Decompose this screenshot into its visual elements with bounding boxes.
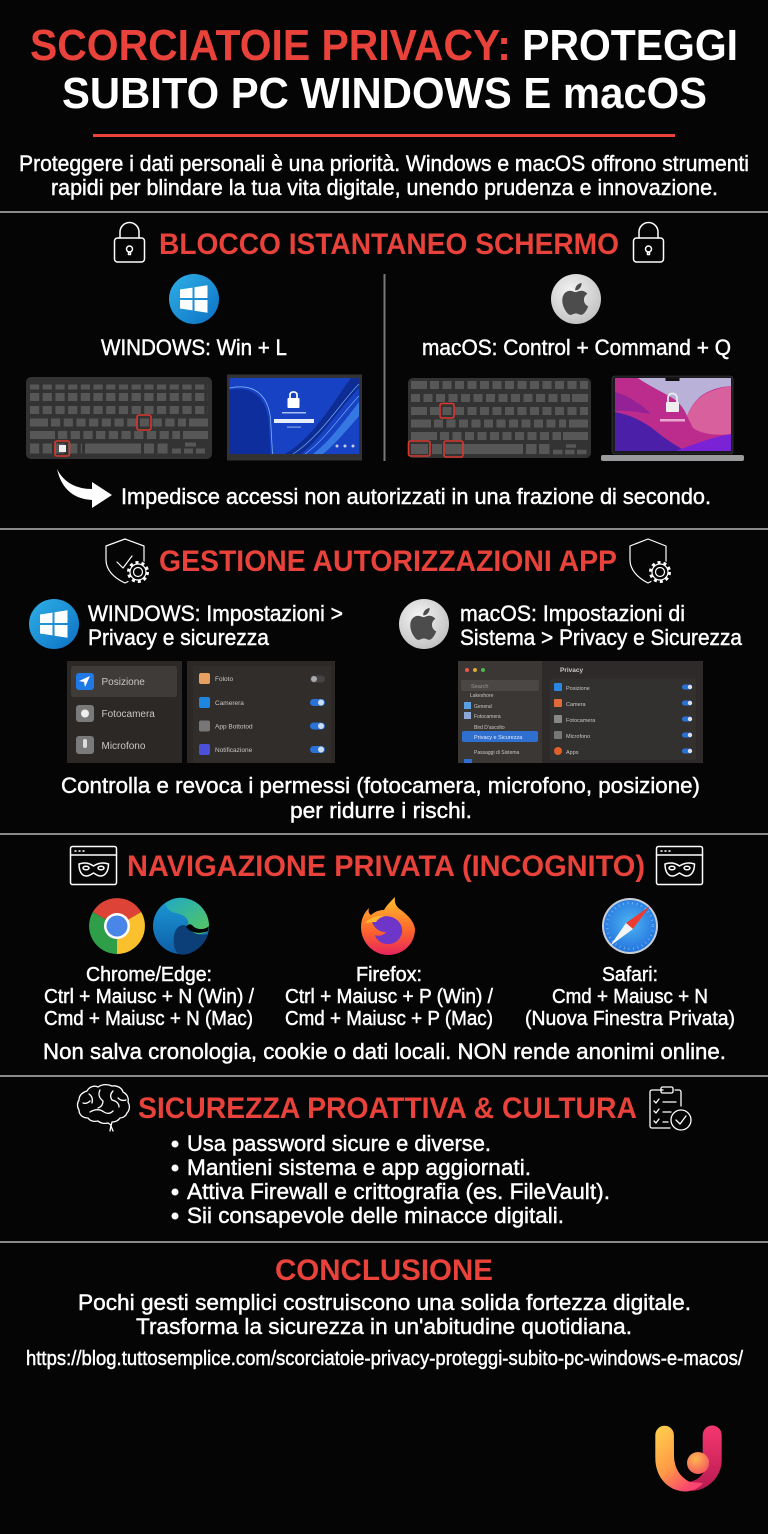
label: windows path: Privacy e sicurezza [88,625,270,650]
icon: clipboard [650,1087,691,1130]
label: macos path: macOS: Impostazioni di [460,601,685,626]
macos settings window: Passaggi di Sistema [474,750,520,756]
macos settings window: Microfono [566,734,590,740]
intro text: rapidi per blindare la tua vita digitale, unendo prudenza e innovazione. [51,175,718,200]
icon: apple logo [551,274,601,324]
icon: windows logo [169,274,219,324]
caption: blocco: Impedisce accessi non autorizzati in una frazione di secondo. [121,484,711,509]
heading: conclusione: CONCLUSIONE [275,1254,493,1287]
icon: firefox [361,897,415,955]
panel: conclusione [26,1254,743,1370]
panel: gestione autorizzazioni app [29,539,743,823]
icon: edge [153,898,209,955]
title: SCORCIATOIE PRIVACY: PROTEGGI [30,21,738,70]
macos settings window: Search [471,684,488,690]
label: windows path: WINDOWS: Impostazioni > [88,601,343,626]
title: SUBITO PC WINDOWS E macOS [62,69,707,118]
title [30,21,738,118]
macos settings window: Camera [566,702,587,708]
windows settings toggles: Camerera [215,700,244,707]
windows settings toggles: Foloto [215,676,233,683]
bullet list: Attiva Firewall e crittografia (es. FileVault). [187,1179,610,1204]
icon: apple logo [399,599,449,649]
shortcuts: safari: (Nuova Finestra Privata) [525,1008,735,1030]
windows settings toggles: App Bottotod [215,724,253,730]
arrow [57,469,112,508]
shortcuts: firefox: Cmd + Maiusc + P (Mac) [285,1008,493,1030]
label: windows path [88,601,343,650]
icon: brain [78,1085,129,1131]
windows settings toggles: Notificazione [215,747,253,754]
icon: left padlock [114,222,144,262]
heading: autorizzazioni: GESTIONE AUTORIZZAZIONI APP [159,545,617,578]
caption: permessi [61,773,700,823]
shortcuts: chrome and edge: Ctrl + Maiusc + N (Win) / [44,986,254,1008]
intro text [19,151,749,200]
windows settings toggles [187,661,335,763]
label: macos path [460,601,743,650]
shortcuts: firefox: Ctrl + Maiusc + P (Win) / [285,986,493,1008]
bullet list: Sii consapevole delle minacce digitali. [187,1203,564,1228]
icon: safari [602,898,658,954]
conclusion text: Trasforma la sicurezza in un'abitudine quotidiana. [136,1314,632,1339]
caption: permessi: Controlla e revoca i permessi (fotocamera, microfono, posizione) [61,773,700,798]
shortcuts: chrome and edge [44,964,254,1030]
windows settings sidebar [67,661,182,763]
icon: right incognito window [656,846,702,884]
shortcuts: safari: Cmd + Maiusc + N [552,986,708,1008]
shortcuts: chrome and edge: Chrome/Edge: [86,964,212,986]
windows keyboard [26,377,212,459]
macos settings window: Bird D'ascolto [474,725,505,731]
icon: left shield and gear [106,539,150,584]
icon: right padlock [634,222,664,262]
macos settings window: Fotocamera [566,718,596,724]
conclusion text: Pochi gesti semplici costruiscono una solida fortezza digitale. [78,1290,691,1315]
label: windows shortcut: WINDOWS: Win + L [101,335,287,360]
bullet list [172,1131,610,1228]
heading: sicurezza: SICUREZZA PROATTIVA & CULTURA [138,1092,637,1125]
icon: right shield and gear [630,539,672,584]
icon: chrome [89,898,145,954]
shortcuts: safari: Safari: [602,964,658,986]
shortcuts: chrome and edge: Cmd + Maiusc + N (Mac) [44,1008,253,1030]
panel: blocco istantaneo schermo [26,222,744,509]
macos settings window: Lakeshore [470,693,494,699]
shortcuts: firefox [285,964,493,1030]
windows settings sidebar: Fotocamera [102,709,155,720]
macos settings window: Apps [566,750,579,756]
heading: navigazione: NAVIGAZIONE PRIVATA (INCOGNITO) [127,850,645,883]
label: macos shortcut: macOS: Control + Command + Q [422,335,731,360]
bullet list: Mantieni sistema e app aggiornati. [187,1155,531,1180]
macos settings window: Privacy e Sicurezza [474,735,523,741]
macos settings window: Fotocamera [474,714,501,720]
conclusion text [78,1290,691,1339]
macos settings window: Privacy [560,667,584,674]
icon: brand logo [655,1426,722,1492]
icon: left incognito window [70,846,116,884]
icon: windows logo [29,599,79,649]
macbook lock screen [601,376,744,461]
windows settings sidebar: Microfono [102,741,146,752]
caption: permessi: per ridurre i rischi. [290,798,472,823]
windows settings sidebar: Posizione [102,677,145,688]
intro text: Proteggere i dati personali è una priorità. Windows e macOS offrono strumenti [19,151,749,176]
mac keyboard [408,378,591,458]
bullet list: Usa password sicure e diverse. [187,1131,491,1156]
heading: blocco: BLOCCO ISTANTANEO SCHERMO [159,228,619,261]
label: macos path: Sistema > Privacy e Sicurezza [460,625,743,650]
macos settings window: General [474,704,492,710]
panel: navigazione privata [43,846,735,1064]
shortcuts: firefox: Firefox: [356,964,422,986]
caption: incognito: Non salva cronologia, cookie o dati locali. NON rende anonimi online. [43,1039,726,1064]
macos settings window [458,661,703,763]
shortcuts: safari [525,964,735,1030]
macos settings window: Posizione [566,686,590,692]
panel: sicurezza proattiva [78,1085,691,1228]
windows lock-screen laptop [227,374,362,460]
